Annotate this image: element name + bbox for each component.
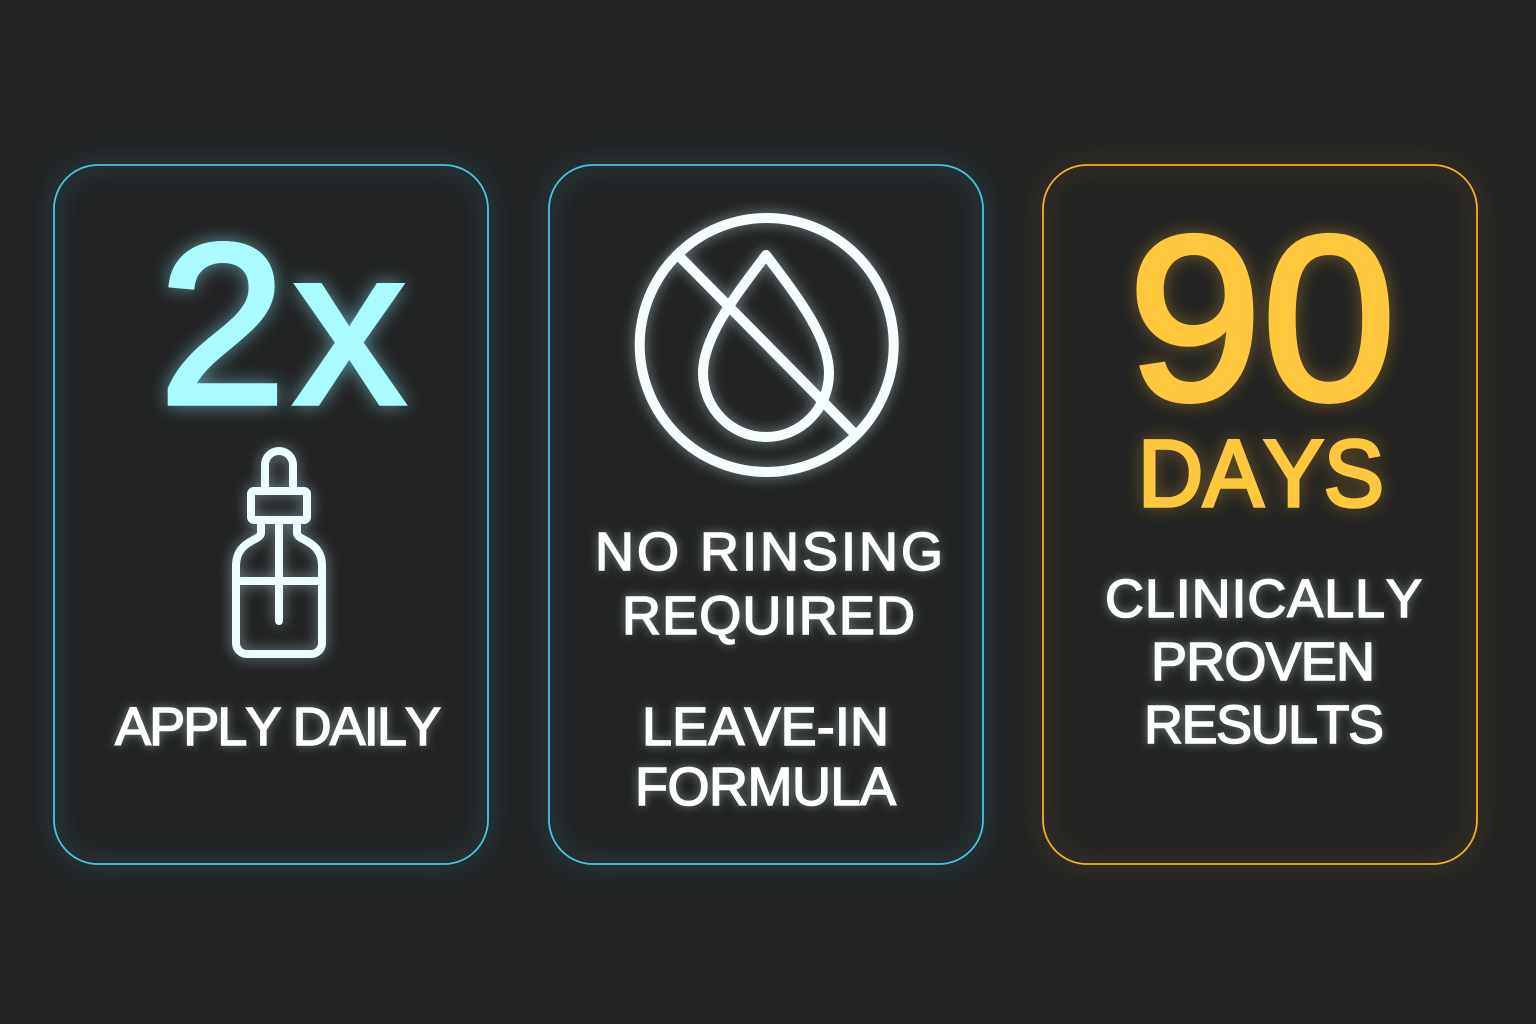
stat unit: days: DAYS [1138, 421, 1384, 527]
stat: 90: 90 [1128, 187, 1396, 449]
icon: dropper bottle [236, 451, 322, 654]
label: clinically proven results: PROVEN [1151, 632, 1375, 692]
label: no rinsing required: REQUIRED [622, 586, 915, 646]
label: no rinsing required: NO RINSING [595, 522, 943, 582]
label: clinically proven results [1105, 569, 1422, 755]
label: leave-in formula [635, 697, 896, 817]
label: no rinsing required [595, 522, 943, 646]
panel: apply daily [54, 165, 488, 864]
panel: clinically proven [1043, 165, 1477, 864]
label: clinically proven results: RESULTS [1144, 695, 1384, 755]
stat: 2x: x [294, 203, 405, 451]
icon: crossed-out water drop [640, 218, 894, 472]
label: leave-in formula: LEAVE-IN [642, 697, 889, 757]
panel: no rinsing [549, 165, 983, 864]
label: clinically proven results: CLINICALLY [1105, 569, 1422, 629]
label: leave-in formula: FORMULA [635, 757, 896, 817]
stat: 2x: 2 [159, 198, 286, 452]
label: apply daily: APPLY DAILY [115, 697, 441, 757]
